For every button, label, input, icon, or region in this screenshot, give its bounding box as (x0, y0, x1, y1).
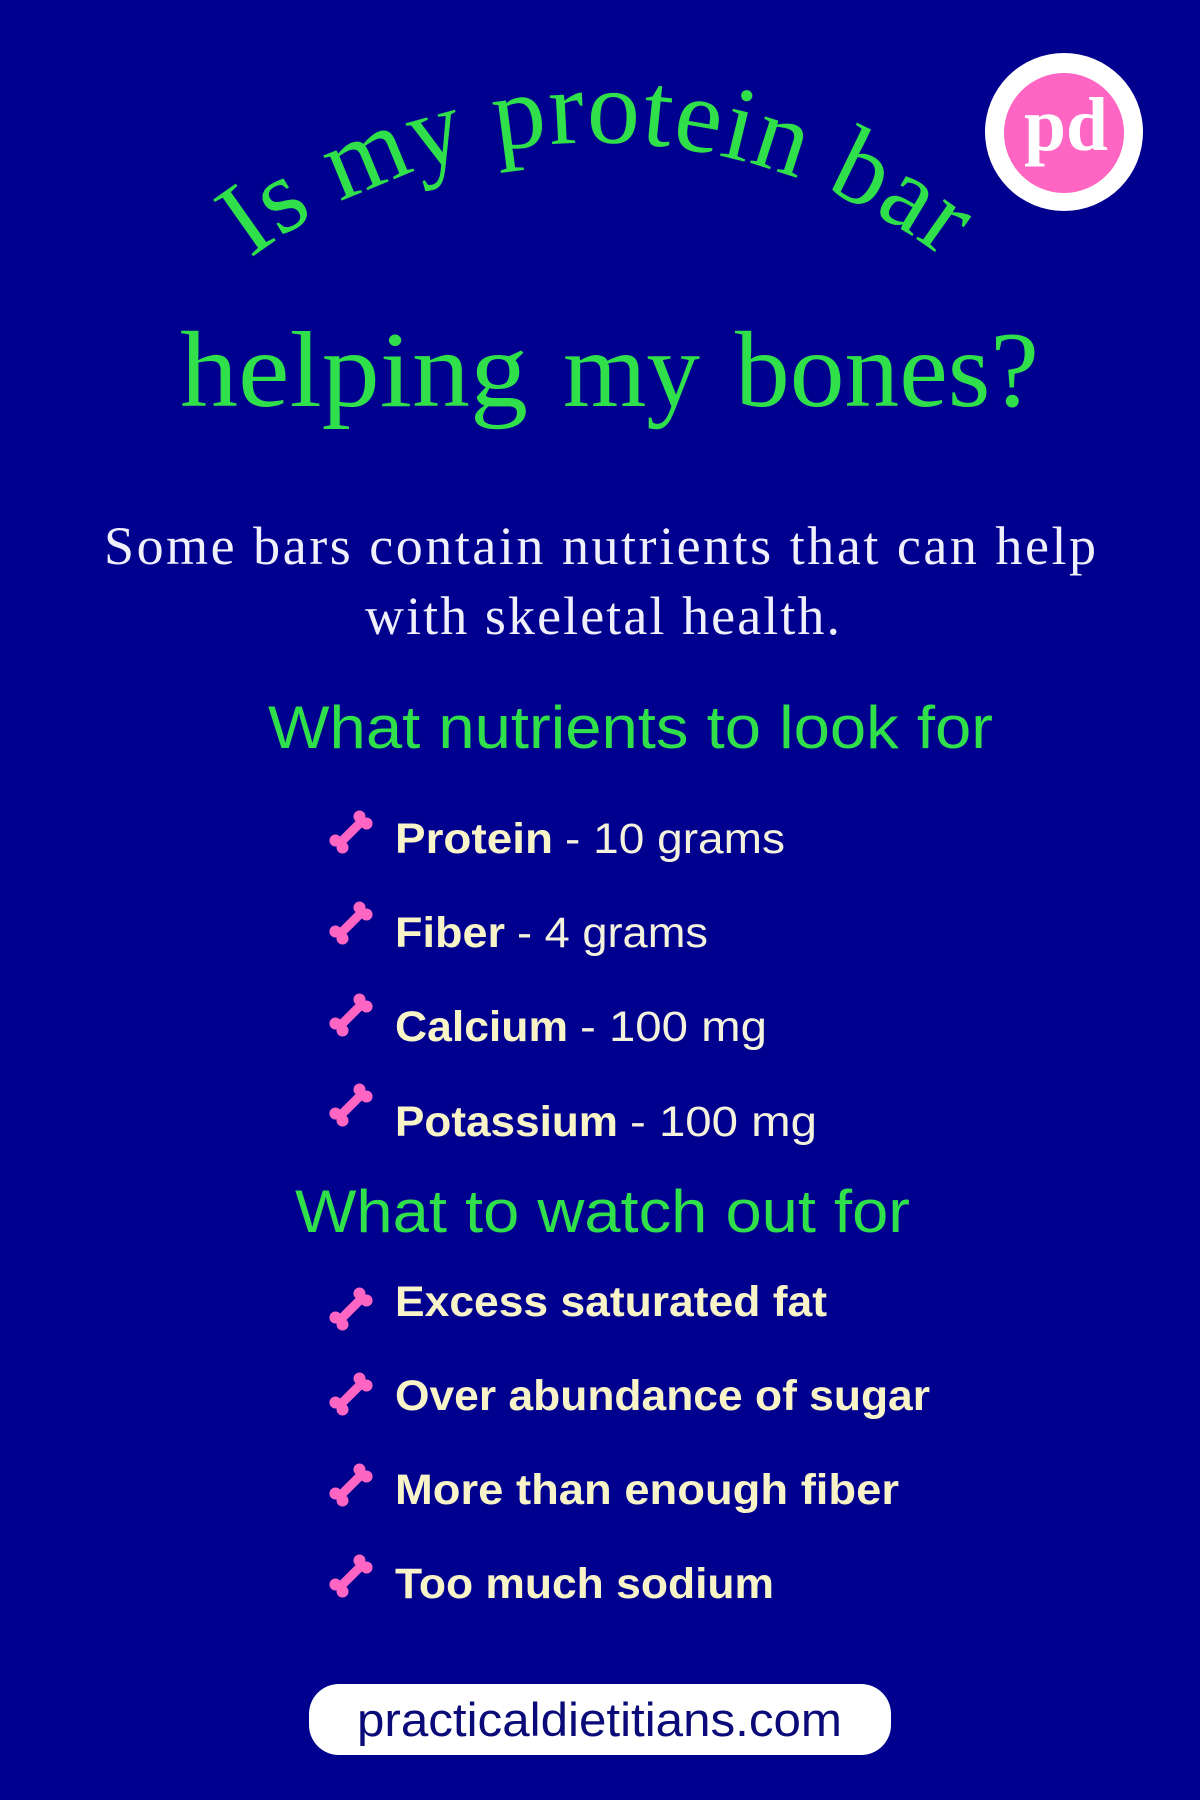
website pill: practicaldietitians.com (357, 1693, 842, 1746)
item: fiber excess: More than enough fiber (395, 1466, 899, 1514)
item: fiber: Fiber (395, 909, 505, 957)
website pill (309, 1684, 891, 1755)
item: fiber: - 4 grams (517, 909, 708, 957)
title: second line: bones? (735, 311, 1039, 430)
item: potassium (327, 1081, 817, 1146)
title: second line: helping (180, 311, 528, 430)
item: fiber (327, 899, 708, 957)
title: second line (180, 311, 1039, 430)
item: calcium: - 100 mg (580, 1003, 767, 1051)
item: sugar: Over abundance of sugar (395, 1372, 930, 1420)
title: curved line: Is my protein bar (213, 86, 972, 256)
intro text (104, 516, 1096, 646)
item: protein: Protein (395, 815, 553, 863)
item: protein: - 10 grams (565, 815, 785, 863)
heading: what nutrients to look for: What nutrients to look for (268, 694, 993, 761)
list: watch out (327, 1278, 930, 1608)
logo badge (985, 53, 1143, 211)
item: calcium (327, 991, 767, 1051)
heading: what to watch out for: What to watch out for (295, 1178, 910, 1245)
item: sodium: Too much sodium (395, 1560, 774, 1608)
item: potassium: Potassium (395, 1098, 618, 1146)
intro text: Some bars contain nutrients that can help (104, 516, 1096, 576)
item: calcium: Calcium (395, 1003, 568, 1051)
item: saturated fat: Excess saturated fat (395, 1278, 827, 1326)
intro text: with skeletal health. (365, 586, 840, 646)
item: protein (327, 808, 785, 863)
item: potassium: - 100 mg (630, 1098, 817, 1146)
list: nutrients (327, 808, 817, 1146)
title: second line: my (563, 311, 700, 430)
logo badge: pd (1024, 83, 1108, 167)
